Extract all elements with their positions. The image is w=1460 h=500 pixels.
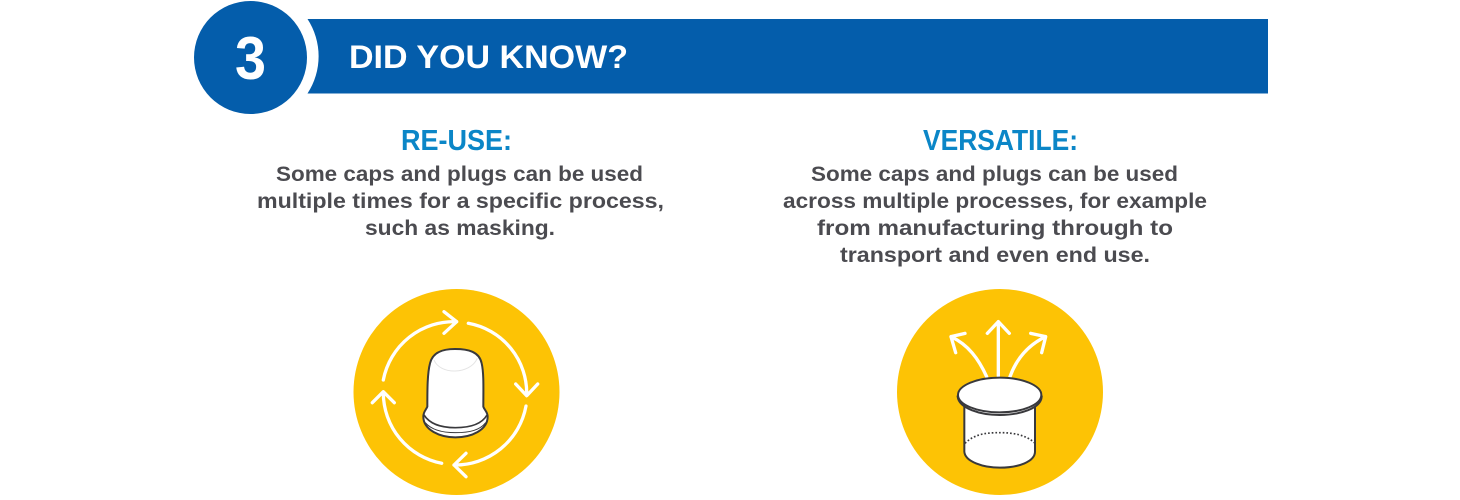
number badge [194, 1, 307, 114]
header banner [308, 19, 1268, 94]
panel: versatile [783, 125, 1207, 495]
text block: re-use: such as masking. [365, 217, 555, 240]
panel: re-use [257, 125, 664, 495]
text block: versatile: across multiple processes, for example [783, 190, 1207, 213]
icon: re-use cap with cycle arrows [354, 289, 560, 495]
number badge: 3 [235, 25, 266, 92]
text block: re-use: Some caps and plugs can be used [276, 163, 643, 186]
text block: re-use [257, 163, 664, 240]
text block: versatile: Some caps and plugs can be used [811, 163, 1178, 186]
title: DID YOU KNOW? [349, 39, 628, 75]
text block: versatile: transport and even end use. [840, 244, 1150, 267]
heading: re-use: RE-USE: [401, 125, 512, 157]
text block: re-use: multiple times for a specific process, [257, 190, 664, 213]
heading: versatile: VERSATILE: [923, 125, 1078, 157]
text block: versatile [783, 163, 1207, 267]
icon: versatile cap with three arrows [897, 289, 1103, 495]
text block: versatile: from manufacturing through to [817, 217, 1173, 240]
